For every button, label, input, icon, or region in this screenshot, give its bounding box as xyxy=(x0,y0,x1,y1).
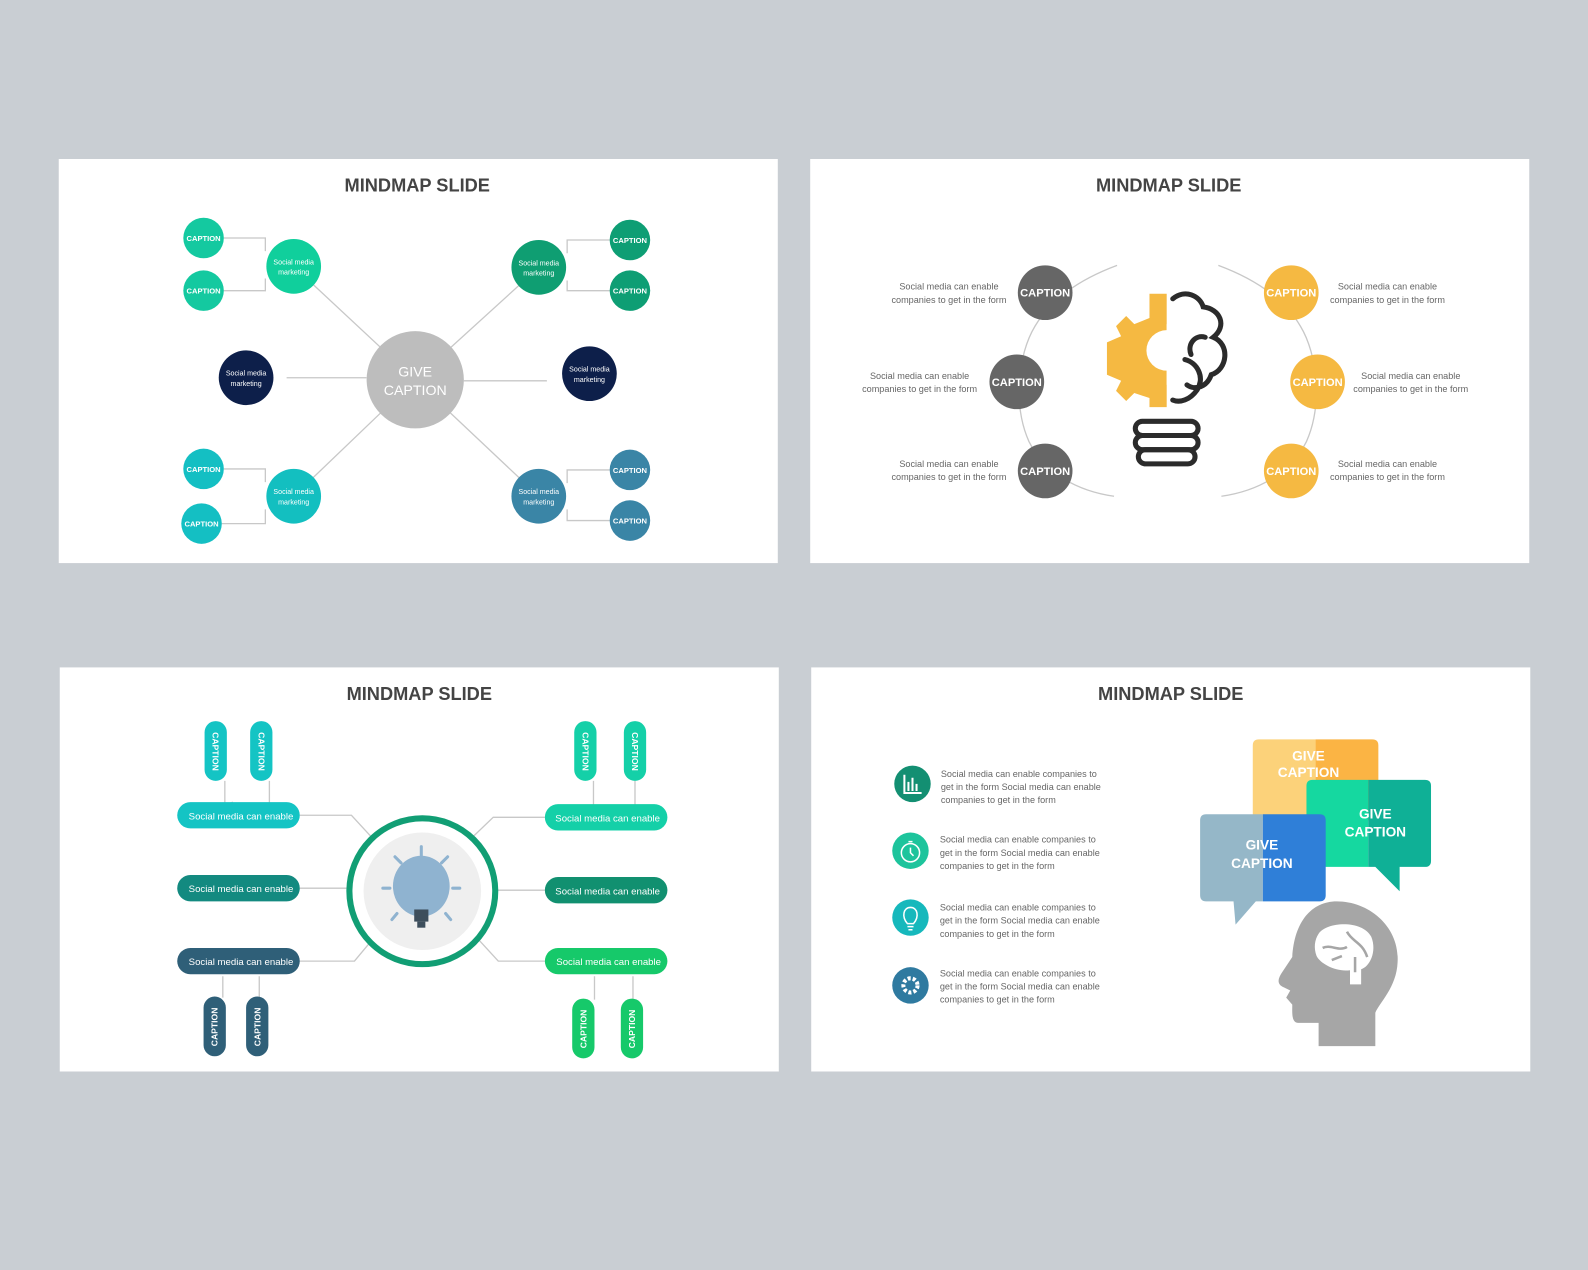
center circle: GIVE xyxy=(398,365,432,381)
descriptions: get in the form Social media can enable xyxy=(941,782,1101,792)
caption circles: CAPTION xyxy=(613,466,647,475)
descriptions: Social media can enable xyxy=(899,282,999,292)
mid nodes: Social media xyxy=(519,259,559,267)
descriptions: Social media can enable xyxy=(1361,371,1460,381)
caption circles: CAPTION xyxy=(187,287,221,296)
caption circles: CAPTION xyxy=(184,520,219,529)
descriptions: get in the form Social media can enable xyxy=(940,848,1100,858)
icon: gear brain bulb xyxy=(1107,294,1225,464)
caption circles: CAPTION xyxy=(613,287,647,296)
speech bubbles: CAPTION xyxy=(1231,856,1293,871)
title: MINDMAP SLIDE xyxy=(1096,175,1241,195)
caption circles: CAPTION xyxy=(187,234,221,243)
speech bubbles: GIVE xyxy=(1292,749,1325,764)
pills: Social media can enable xyxy=(189,884,293,895)
gray captions xyxy=(989,265,1345,498)
panel: mindmap circles xyxy=(59,159,778,563)
title: MINDMAP SLIDE xyxy=(345,175,490,195)
icon: head with brain xyxy=(1279,901,1398,1046)
mid nodes: Social media xyxy=(273,488,314,496)
speech bubbles: GIVE xyxy=(1246,838,1278,853)
descriptions: Social media can enable xyxy=(870,371,969,381)
gray captions: CAPTION xyxy=(1020,466,1070,478)
mid nodes: Social media xyxy=(226,370,266,378)
gray captions: CAPTION xyxy=(1020,288,1070,300)
gray captions: CAPTION xyxy=(1266,466,1316,478)
speech bubbles xyxy=(1200,739,1431,925)
descriptions: companies to get in the form xyxy=(940,861,1055,871)
vertical captions: CAPTION xyxy=(210,1008,220,1046)
icon list xyxy=(892,766,931,1004)
descriptions xyxy=(940,769,1101,1005)
pills: Social media can enable xyxy=(556,957,661,968)
speech bubbles: CAPTION xyxy=(1345,825,1406,840)
gray captions: CAPTION xyxy=(992,377,1042,389)
mid nodes xyxy=(219,239,617,524)
descriptions: get in the form Social media can enable xyxy=(940,916,1100,926)
descriptions: companies to get in the form xyxy=(941,795,1056,805)
descriptions: companies to get in the form xyxy=(940,995,1055,1005)
speech bubbles: GIVE xyxy=(1359,806,1392,821)
center circle: CAPTION xyxy=(384,383,447,399)
vertical captions: CAPTION xyxy=(578,1010,588,1048)
panel: speech bubbles head xyxy=(811,667,1530,1071)
caption circles: CAPTION xyxy=(613,236,647,245)
mid nodes: marketing xyxy=(574,376,605,384)
descriptions: Social media can enable companies to xyxy=(940,835,1096,845)
descriptions: companies to get in the form xyxy=(940,929,1055,939)
pills: Social media can enable xyxy=(555,886,660,897)
mid nodes: marketing xyxy=(231,380,262,388)
descriptions: companies to get in the form xyxy=(862,384,977,394)
descriptions: companies to get in the form xyxy=(1353,384,1468,394)
pills: Social media can enable xyxy=(555,813,660,824)
mid nodes: marketing xyxy=(278,268,309,276)
descriptions: companies to get in the form xyxy=(1330,295,1445,305)
vertical captions: CAPTION xyxy=(256,732,266,771)
descriptions: Social media can enable xyxy=(899,459,999,469)
vertical captions: CAPTION xyxy=(580,732,590,771)
caption circles: CAPTION xyxy=(613,517,647,526)
pills xyxy=(177,802,667,974)
vertical captions: CAPTION xyxy=(630,732,640,771)
gray captions: CAPTION xyxy=(1293,377,1343,389)
gray captions: CAPTION xyxy=(1266,288,1316,300)
title: MINDMAP SLIDE xyxy=(347,684,492,704)
mid nodes: Social media xyxy=(273,258,314,266)
descriptions xyxy=(862,282,1468,482)
descriptions: Social media can enable xyxy=(1338,459,1437,469)
center circle xyxy=(367,331,464,428)
panel: bulb mindmap xyxy=(60,667,779,1071)
descriptions: Social media can enable companies to xyxy=(940,968,1096,978)
mid nodes: marketing xyxy=(523,498,554,506)
descriptions: companies to get in the form xyxy=(891,472,1006,482)
descriptions: get in the form Social media can enable xyxy=(940,981,1100,991)
vertical captions: CAPTION xyxy=(627,1010,637,1048)
vertical captions: CAPTION xyxy=(252,1008,262,1046)
caption circles xyxy=(181,218,650,544)
descriptions: companies to get in the form xyxy=(891,295,1006,305)
center bulb circle xyxy=(349,818,495,964)
pills: Social media can enable xyxy=(189,811,293,822)
descriptions: Social media can enable companies to xyxy=(940,902,1096,912)
panel: gear brain xyxy=(810,159,1529,563)
descriptions: Social media can enable xyxy=(1338,282,1437,292)
caption circles: CAPTION xyxy=(187,465,221,474)
mid nodes: Social media xyxy=(569,366,610,374)
mid nodes: marketing xyxy=(278,498,309,506)
descriptions: Social media can enable companies to xyxy=(941,769,1097,779)
pills: Social media can enable xyxy=(189,957,293,968)
mid nodes: marketing xyxy=(523,269,554,277)
speech bubbles: CAPTION xyxy=(1278,765,1339,780)
descriptions: companies to get in the form xyxy=(1330,472,1445,482)
title: MINDMAP SLIDE xyxy=(1098,684,1243,704)
vertical captions: CAPTION xyxy=(211,732,221,771)
vertical captions xyxy=(204,721,646,1058)
mid nodes: Social media xyxy=(519,488,559,496)
